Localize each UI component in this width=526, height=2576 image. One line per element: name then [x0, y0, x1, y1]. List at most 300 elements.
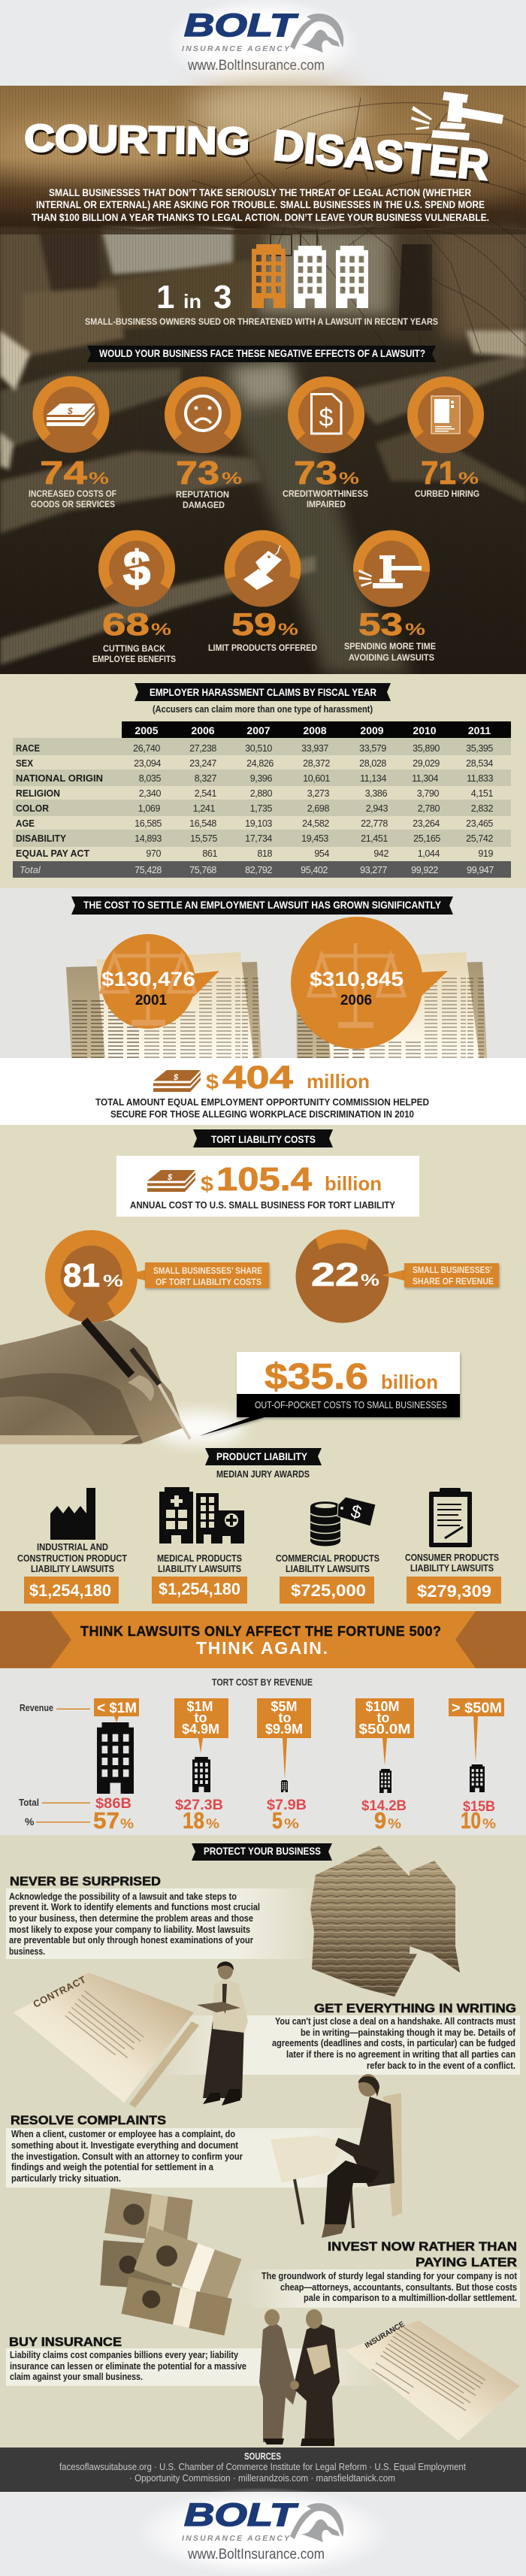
- caption: SECURE FOR THOSE ALLEGING WORKPLACE DISCRIMINATION IN 2010: [110, 1108, 414, 1120]
- product category: commercial: [276, 1553, 379, 1604]
- icon: money stack: $: [173, 1073, 179, 1082]
- table values: 3,790: [417, 788, 439, 799]
- table values: 3,273: [307, 788, 329, 799]
- tip text: insurance can lessen or eliminate the potential for a massive: [10, 2360, 246, 2372]
- table values: 970: [146, 848, 161, 859]
- table rows shading: [13, 738, 511, 847]
- tip: never be surprised: NEVER BE SURPRISED: [10, 1875, 161, 1888]
- table total row: 99,922: [411, 865, 438, 875]
- logo wordmark: BOLT: [184, 2497, 299, 2533]
- caption: SPENDING MORE TIME: [344, 641, 436, 652]
- percentage: [421, 455, 479, 491]
- tip text: When a client, customer or employee has a complaint, do: [11, 2128, 235, 2139]
- document photo left: [66, 952, 261, 1058]
- stat box: $35.6 billion: [199, 1352, 460, 1436]
- table values: 9,396: [250, 773, 272, 784]
- callout: share of tort costs: [124, 1262, 269, 1288]
- row label: total: Total: [19, 1797, 39, 1808]
- text panel backgrounds: [6, 1888, 520, 2386]
- product category: consumer: LIABILITY LAWSUITS: [410, 1563, 494, 1574]
- table values: 28,028: [359, 758, 386, 769]
- table values: 19,103: [245, 818, 272, 829]
- award value: $1,254,180: [159, 1580, 240, 1598]
- icon: invoice document: $: [319, 404, 334, 432]
- year: 2006: [340, 993, 372, 1008]
- panel: $404 million: [0, 1058, 526, 1125]
- tip text: particularly tricky situation.: [11, 2172, 121, 2184]
- icon: coins and price tag: $: [349, 1501, 364, 1523]
- table values: 11,304: [412, 773, 438, 784]
- sources panel: [0, 2448, 526, 2492]
- stat box: $105.4 billion: [116, 1156, 419, 1217]
- stat circle: 22%: [296, 1229, 389, 1323]
- panel: protect your business: [0, 1835, 526, 2448]
- table values: 23,247: [189, 758, 216, 769]
- bracket: $10M to $50.0M: [355, 1698, 414, 1834]
- product category: industrial: LIABILITY LAWSUITS: [31, 1564, 114, 1574]
- panel: tort liability costs: [0, 1125, 526, 1611]
- percentage: 71: [421, 455, 456, 491]
- table values: 33,937: [301, 743, 328, 754]
- bracket: over $50M: [449, 1698, 504, 1834]
- tip: invest now: INVEST NOW RATHER THAN: [328, 2240, 517, 2254]
- amount: billion: [381, 1371, 438, 1393]
- table row labels: AGE: [16, 818, 35, 829]
- intro paragraph: SMALL BUSINESSES THAT DON’T TAKE SERIOUSLY THE THREAT OF LEGAL ACTION (WHETHER: [49, 187, 471, 198]
- title word: courting: COURTING: [24, 116, 250, 162]
- table values: 10,601: [303, 773, 330, 784]
- icon: gavel: [358, 555, 422, 588]
- caption: [29, 488, 116, 509]
- bracket: $5M to $9.9M: [257, 1698, 311, 1834]
- product category: medical: [152, 1553, 247, 1604]
- table values: 2,340: [139, 788, 161, 799]
- table values: 27,238: [189, 743, 216, 754]
- table header years: 2011: [468, 724, 491, 736]
- footer: logo area: [0, 2487, 526, 2576]
- row label: revenue: [20, 1703, 90, 1713]
- table values: 35,890: [413, 743, 440, 754]
- bracket: $1M to $4.9M: %: [206, 1816, 219, 1831]
- caption: AVOIDING LAWSUITS: [349, 652, 434, 663]
- amount: 404: [222, 1060, 293, 1096]
- tip: buy insurance: [9, 2336, 246, 2382]
- website url: www.BoltInsurance.com: [187, 58, 325, 74]
- tip text: findings and weigh the potential for settlement in a: [11, 2161, 214, 2172]
- bracket: $1M to $4.9M: $4.9M: [182, 1722, 219, 1737]
- caption: EMPLOYEE BENEFITS: [92, 654, 176, 664]
- tip text: business.: [9, 1946, 45, 1957]
- table values: 1,044: [418, 848, 440, 859]
- icon: white building: [294, 246, 326, 308]
- caption: TOTAL AMOUNT EQUAL EMPLOYMENT OPPORTUNITY COMMISSION HELPED: [95, 1096, 429, 1108]
- caption: ANNUAL COST TO U.S. SMALL BUSINESS FOR TORT LIABILITY: [130, 1199, 395, 1211]
- website url: www.BoltInsurance.com: [187, 2547, 325, 2562]
- product category: consumer: CONSUMER PRODUCTS: [405, 1553, 499, 1563]
- percentage: %: [405, 620, 425, 639]
- percentage: [63, 1257, 123, 1294]
- percentage: %: [458, 469, 479, 488]
- panel: tort cost by revenue: [0, 1668, 526, 1835]
- icon: invoice document: [311, 394, 341, 434]
- caption: IMPAIRED: [307, 499, 346, 509]
- effect: 73% creditworthiness impaired: [283, 376, 368, 509]
- table values: 15,575: [190, 833, 217, 844]
- amount: $130,476: [101, 968, 195, 990]
- percentage: [311, 1256, 379, 1293]
- table values: 26,740: [133, 743, 160, 754]
- bracket: under $1M: < $1M: [97, 1701, 137, 1716]
- logo agency text: INSURANCE AGENCY: [182, 44, 290, 53]
- photo: seated man at table: [271, 2074, 402, 2238]
- table header years: 2008: [303, 724, 327, 736]
- watermark: scales: [309, 943, 404, 1025]
- table values: 16,585: [135, 818, 162, 829]
- table values: 2,541: [195, 788, 216, 799]
- logo wordmark: BOLT: [184, 8, 299, 44]
- row label: percent: [25, 1816, 90, 1828]
- product category: commercial: LIABILITY LAWSUITS: [286, 1564, 370, 1574]
- heading ribbon: negative effects: [87, 346, 436, 362]
- table header years: 2005: [135, 724, 159, 736]
- icon: hospital: [159, 1487, 244, 1543]
- percentage: [176, 455, 242, 491]
- percentage: 73: [294, 455, 337, 491]
- amount: million: [307, 1070, 370, 1093]
- percentage: [294, 455, 359, 491]
- table values: 3,386: [365, 788, 387, 799]
- table values: 8,035: [139, 773, 161, 784]
- icon: building: [470, 1764, 485, 1792]
- percentage: 74: [40, 455, 88, 491]
- stat circle: 81%: [45, 1230, 138, 1323]
- bracket: $1M to $4.9M: to: [194, 1710, 207, 1725]
- tip text: claim against your small business.: [10, 2371, 143, 2382]
- table values: 30,510: [245, 743, 272, 754]
- photo: standing man reading: [197, 1961, 248, 2106]
- percentage: 59: [231, 606, 277, 642]
- table total row: 95,402: [301, 865, 328, 875]
- heading ribbon: product liability: PRODUCT LIABILITY: [216, 1451, 307, 1462]
- table values: 25,742: [466, 833, 493, 844]
- effect: 59% limit products: [208, 531, 317, 653]
- tip: invest now: [261, 2240, 518, 2303]
- banner answer: THINK AGAIN.: [196, 1638, 328, 1658]
- product category: medical: MEDICAL PRODUCTS: [157, 1553, 242, 1564]
- stat number: 3: [213, 279, 231, 316]
- heading ribbon: [135, 683, 391, 701]
- caption: [344, 641, 436, 663]
- bracket: $5M to $9.9M: $5M: [271, 1699, 298, 1714]
- photo: contract document: [14, 1973, 199, 2108]
- amount: billion: [325, 1172, 382, 1195]
- title word: disaster: DISASTER: [271, 121, 491, 190]
- bracket: $1M to $4.9M: $1M: [186, 1699, 213, 1714]
- tip text: [9, 1891, 260, 1957]
- table row labels: COLOR: [16, 803, 50, 814]
- tip text: Acknowledge the possibility of a lawsuit and take steps to: [9, 1891, 237, 1902]
- table row labels: NATIONAL ORIGIN: [16, 772, 103, 784]
- table values: 11,134: [360, 773, 386, 784]
- bracket: under $1M: $86B: [95, 1796, 132, 1812]
- intro paragraph: [32, 187, 489, 223]
- caption: DAMAGED: [183, 500, 225, 510]
- product category: commercial: COMMERCIAL PRODUCTS: [276, 1553, 379, 1564]
- table total row: 99,947: [467, 865, 494, 875]
- table values: 1,069: [138, 803, 160, 814]
- bracket: over $50M: $15B: [463, 1799, 495, 1815]
- caption: GOODS OR SERVICES: [31, 499, 115, 509]
- icon: building: [281, 1780, 288, 1792]
- table header years: [122, 721, 511, 738]
- panel: harassment claims table: [0, 674, 526, 888]
- percentage: 68: [102, 606, 150, 642]
- table total row: 82,792: [245, 865, 272, 875]
- icon: orange building: [252, 244, 286, 308]
- table values: 25,165: [413, 833, 440, 844]
- tip: resolve complaints: [11, 2114, 243, 2184]
- table total row: 75,768: [189, 865, 216, 875]
- hero torn edge: [0, 227, 526, 234]
- tip text: to your business, then determine the problem areas and those: [9, 1912, 253, 1924]
- percentage: [40, 455, 109, 491]
- icon: torn price tag: [243, 546, 282, 590]
- tip text: [272, 2015, 516, 2071]
- table row labels: RELIGION: [16, 788, 60, 799]
- tip: get everything in writing: [272, 2002, 516, 2071]
- tip text: [261, 2270, 518, 2303]
- bracket: $5M to $9.9M: %: [284, 1816, 299, 1831]
- photo: paper stacks: [310, 1846, 460, 1997]
- icon: building: [379, 1769, 391, 1793]
- tip: buy insurance: BUY INSURANCE: [9, 2336, 122, 2349]
- bracket: $1M to $4.9M: $27.3B: [175, 1797, 223, 1813]
- watermark: scales: [101, 942, 195, 1023]
- table values: 19,453: [301, 833, 328, 844]
- table values: 24,582: [302, 818, 329, 829]
- stat: 1 in 3 small-business owners: [85, 244, 438, 327]
- percentage: %: [89, 469, 109, 488]
- table values: 2,832: [471, 803, 493, 814]
- table total row: [13, 861, 511, 878]
- table values: 35,395: [466, 743, 493, 754]
- bracket: over $50M: > $50M: [452, 1701, 502, 1716]
- table values: 2,943: [366, 803, 388, 814]
- icon: building: [97, 1722, 134, 1794]
- table row labels: EQUAL PAY ACT: [16, 848, 89, 859]
- tip text: something about it. Investigate everything and document: [11, 2139, 239, 2151]
- bracket: over $50M: %: [482, 1816, 496, 1831]
- amount: [201, 1161, 382, 1198]
- table values: 1,735: [250, 803, 272, 814]
- tip text: are preventable but only through honest examinations of your: [9, 1934, 253, 1946]
- stat caption: SMALL-BUSINESS OWNERS SUED OR THREATENED WITH A LAWSUIT IN RECENT YEARS: [85, 316, 438, 327]
- bracket: $5M to $9.9M: $7.9B: [267, 1797, 307, 1813]
- heading ribbon: product liability: [205, 1448, 322, 1465]
- callout: share of revenue: [382, 1263, 499, 1287]
- table values: 4,151: [471, 788, 493, 799]
- effect: 74% increased costs: [29, 376, 116, 509]
- table values: 21,451: [361, 833, 388, 844]
- row label: percent: %: [25, 1816, 35, 1828]
- percentage: %: [103, 1271, 123, 1290]
- icon: building: [192, 1757, 210, 1792]
- table values: 23,465: [466, 818, 493, 829]
- tip text: Liability claims cost companies billions every year; liability: [10, 2349, 239, 2360]
- logo horse mark: [290, 14, 343, 53]
- tip text: prevent it. Work to identify elements and functions most crucial: [9, 1901, 260, 1912]
- bracket: $1M to $4.9M: [174, 1698, 228, 1834]
- title: courting disaster: [24, 116, 491, 190]
- tip text: the investigation. Consult with an attorney to confirm your: [11, 2151, 243, 2162]
- icon: white building: [336, 246, 368, 308]
- stat number: 1: [156, 279, 174, 316]
- award value: $725,000: [291, 1581, 366, 1600]
- award value: $279,309: [417, 1582, 491, 1601]
- table header years: 2009: [360, 724, 384, 736]
- panel: cost to settle: [0, 888, 526, 1058]
- percentage: %: [339, 469, 359, 488]
- callout: share of tort costs: OF TORT LIABILITY COSTS: [156, 1277, 261, 1287]
- amount: 105.4: [216, 1161, 313, 1198]
- heading ribbon: negative effects: WOULD YOUR BUSINESS FACE THESE NEGATIVE EFFECTS OF A LAWSUIT?: [99, 348, 425, 359]
- percentage: [358, 606, 425, 642]
- tip text: most likely to expose your company to liability. Most lawsuits: [9, 1924, 250, 1935]
- subheading: MEDIAN JURY AWARDS: [216, 1468, 310, 1480]
- table values: 24,826: [246, 758, 274, 769]
- table total row: Total: [20, 864, 41, 875]
- table values: 818: [257, 848, 272, 859]
- heading ribbon: THE COST TO SETTLE AN EMPLOYMENT LAWSUIT HAS GROWN SIGNIFICANTLY: [83, 899, 441, 911]
- product category: medical: LIABILITY LAWSUITS: [158, 1564, 241, 1574]
- icon: clipboard: [429, 1488, 472, 1547]
- bracket: $10M to $50.0M: $14.2B: [361, 1798, 407, 1814]
- table header years: 2006: [191, 724, 215, 736]
- bracket: under $1M: [93, 1698, 139, 1834]
- table values: 22,778: [361, 818, 388, 829]
- heading ribbon: TORT LIABILITY COSTS: [211, 1134, 316, 1145]
- percentage: %: [361, 1271, 379, 1290]
- tip: never be surprised: [9, 1875, 260, 1957]
- table values: 954: [314, 848, 329, 859]
- photo: hand with pen: [0, 1320, 244, 1444]
- award value: $1,254,180: [29, 1581, 111, 1600]
- table values: 942: [373, 848, 388, 859]
- tip: invest now: PAYING LATER: [416, 2256, 517, 2269]
- product category: industrial: [17, 1542, 127, 1604]
- shattered glass cracks: [188, 98, 526, 353]
- document photo right: [296, 952, 487, 1058]
- sources list: [59, 2461, 466, 2484]
- tip text: [11, 2128, 243, 2184]
- table values: 33,579: [359, 743, 386, 754]
- icon: money stack: $: [67, 406, 73, 416]
- bracket: $10M to $50.0M: %: [388, 1816, 401, 1831]
- caption: OUT-OF-POCKET COSTS TO SMALL BUSINESSES: [255, 1399, 447, 1410]
- product category: industrial: CONSTRUCTION PRODUCT: [17, 1553, 127, 1564]
- banner: think again: [0, 1611, 526, 1668]
- bracket: $10M to $50.0M: $50.0M: [359, 1722, 410, 1737]
- icon: broken dollar: $: [123, 540, 150, 596]
- caption: CREDITWORTHINESS: [283, 488, 368, 499]
- table note: (Accusers can claim more than one type of harassment): [153, 703, 373, 715]
- table values: [133, 743, 493, 859]
- table values: 11,833: [467, 773, 493, 784]
- bracket: $10M to $50.0M: $10M: [365, 1699, 400, 1714]
- callout: share of revenue: SHARE OF REVENUE: [413, 1276, 494, 1286]
- table row labels: SEX: [16, 757, 33, 769]
- bubble: 2006 settlement: [291, 917, 448, 1049]
- table values: 2,698: [307, 803, 329, 814]
- effect: 68% cutting benefits: [92, 531, 176, 664]
- banner question: THINK LAWSUITS ONLY AFFECT THE FORTUNE 500?: [80, 1624, 441, 1639]
- table total row: 93,277: [360, 865, 387, 875]
- caption: [283, 488, 368, 509]
- amount: $310,845: [310, 968, 404, 990]
- bracket: $10M to $50.0M: 9: [374, 1807, 386, 1834]
- table values: 2,880: [250, 788, 272, 799]
- chart title: TORT COST BY REVENUE: [212, 1677, 313, 1688]
- stat number: in: [183, 290, 201, 313]
- photo: insurance document: INSURANCE: [364, 2320, 407, 2351]
- amount: $: [206, 1070, 219, 1093]
- amount: [206, 1060, 370, 1096]
- bracket: $1M to $4.9M: 18: [183, 1807, 204, 1834]
- percentage: 73: [176, 455, 219, 491]
- icon: sad face: [186, 396, 220, 431]
- heading ribbon: [192, 1843, 332, 1861]
- bracket: over $50M: 10: [461, 1807, 481, 1834]
- icon: factory: [50, 1488, 95, 1540]
- row label: total: [19, 1797, 90, 1808]
- table values: 23,264: [413, 818, 440, 829]
- table header years: 2010: [413, 724, 437, 736]
- percentage: [231, 606, 298, 642]
- heading ribbon: [193, 1129, 333, 1147]
- heading ribbon: PROTECT YOUR BUSINESS: [204, 1846, 321, 1857]
- icon: money stack: [153, 1070, 201, 1092]
- table values: 861: [202, 848, 217, 859]
- table values: 28,372: [303, 758, 330, 769]
- bracket: under $1M: %: [120, 1816, 134, 1831]
- table values: 23,094: [134, 758, 161, 769]
- heading ribbon: [71, 896, 453, 915]
- icon: money stack: [47, 404, 95, 426]
- percentage: 22: [311, 1256, 359, 1293]
- table values: 1,241: [193, 803, 215, 814]
- effect: 71% curbed hiring: [407, 376, 484, 499]
- caption: [95, 1096, 429, 1120]
- bracket: $5M to $9.9M: to: [278, 1710, 292, 1725]
- table values: 14,893: [135, 833, 162, 844]
- photo: money bundles: [100, 2188, 242, 2336]
- icon: gavel: [411, 92, 503, 141]
- tip: get everything in writing: GET EVERYTHING IN WRITING: [314, 2002, 516, 2015]
- percentage: 81: [63, 1257, 100, 1294]
- stat number: [156, 279, 231, 316]
- photo: handshake: [259, 2309, 340, 2446]
- table row labels: RACE: [16, 742, 40, 754]
- callout: share of revenue: SMALL BUSINESSES’: [413, 1265, 492, 1275]
- bracket: $5M to $9.9M: 5: [272, 1807, 283, 1834]
- percentage: %: [151, 620, 171, 639]
- product category: consumer: [405, 1553, 501, 1604]
- bracket: $5M to $9.9M: $9.9M: [265, 1722, 303, 1737]
- table values: 28,534: [466, 758, 493, 769]
- heading ribbon: EMPLOYER HARASSMENT CLAIMS BY FISCAL YEAR: [150, 687, 376, 698]
- table values: 8,327: [195, 773, 216, 784]
- table values: 16,548: [189, 818, 216, 829]
